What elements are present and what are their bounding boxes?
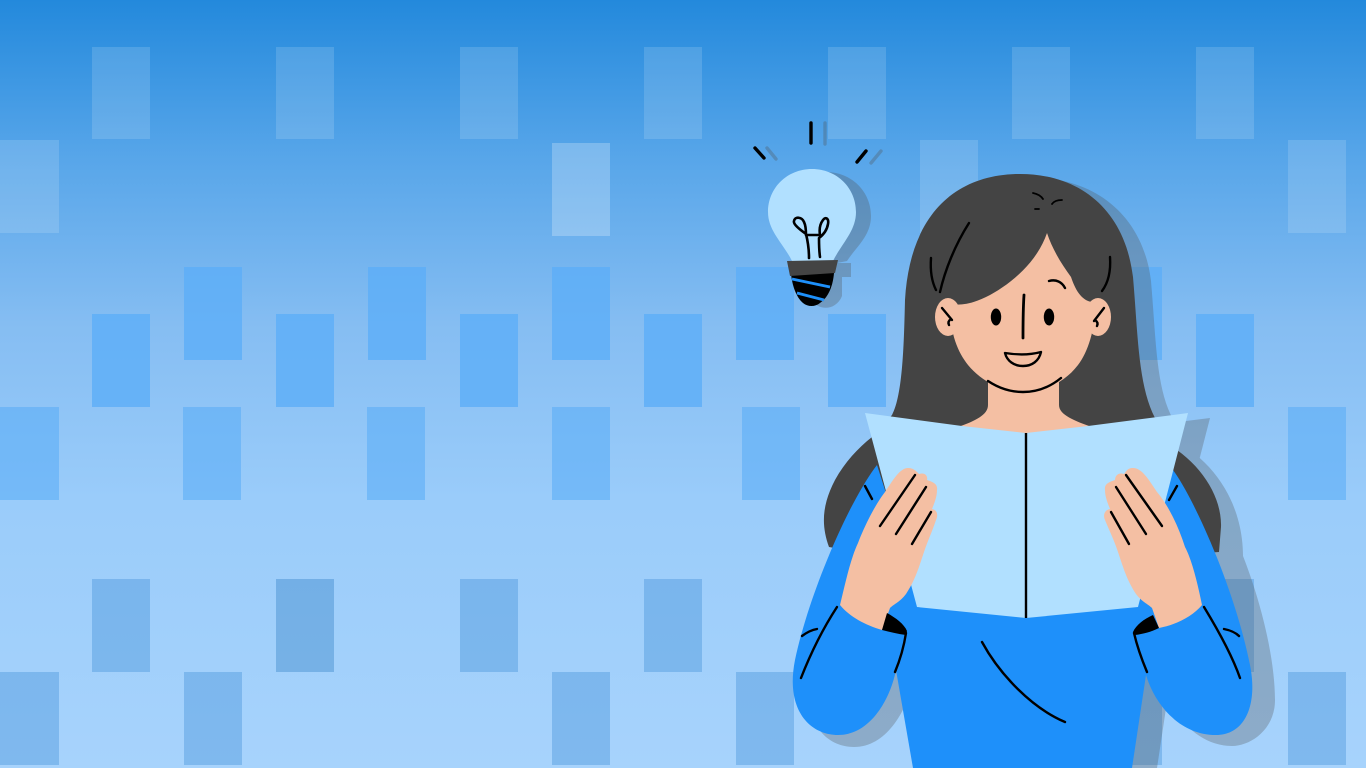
face bbox=[950, 233, 1096, 392]
bulb stripes bbox=[792, 279, 830, 300]
bulb shadow bbox=[767, 123, 881, 308]
bulb collar bbox=[787, 260, 838, 276]
background tiles: middle blue rows bbox=[0, 267, 1346, 500]
bulb screw base bbox=[791, 273, 834, 306]
person reading bbox=[793, 174, 1275, 768]
sleeve cuffs bbox=[882, 613, 1159, 635]
left hand bbox=[840, 468, 937, 630]
background tiles: top light rows bbox=[0, 47, 1346, 236]
background tiles: bottom dark rows bbox=[0, 579, 1346, 765]
bulb glass bbox=[768, 169, 856, 261]
neck bbox=[958, 370, 1092, 440]
eyes bbox=[991, 308, 1054, 326]
open paper bbox=[865, 413, 1188, 618]
light rays bbox=[755, 123, 866, 162]
ears bbox=[935, 298, 1111, 336]
icon: light bulb bbox=[755, 123, 881, 308]
right hand bbox=[1104, 468, 1202, 628]
bulb filament bbox=[794, 218, 828, 258]
paper spine bbox=[1025, 433, 1027, 618]
sweater bbox=[793, 465, 1252, 768]
person shadow bbox=[809, 178, 1275, 768]
hair bbox=[824, 174, 1221, 560]
mouth bbox=[1005, 352, 1041, 366]
nose, eyebrow, jaw and hair lines bbox=[931, 193, 1110, 392]
finger and sleeve lines bbox=[801, 475, 1240, 722]
